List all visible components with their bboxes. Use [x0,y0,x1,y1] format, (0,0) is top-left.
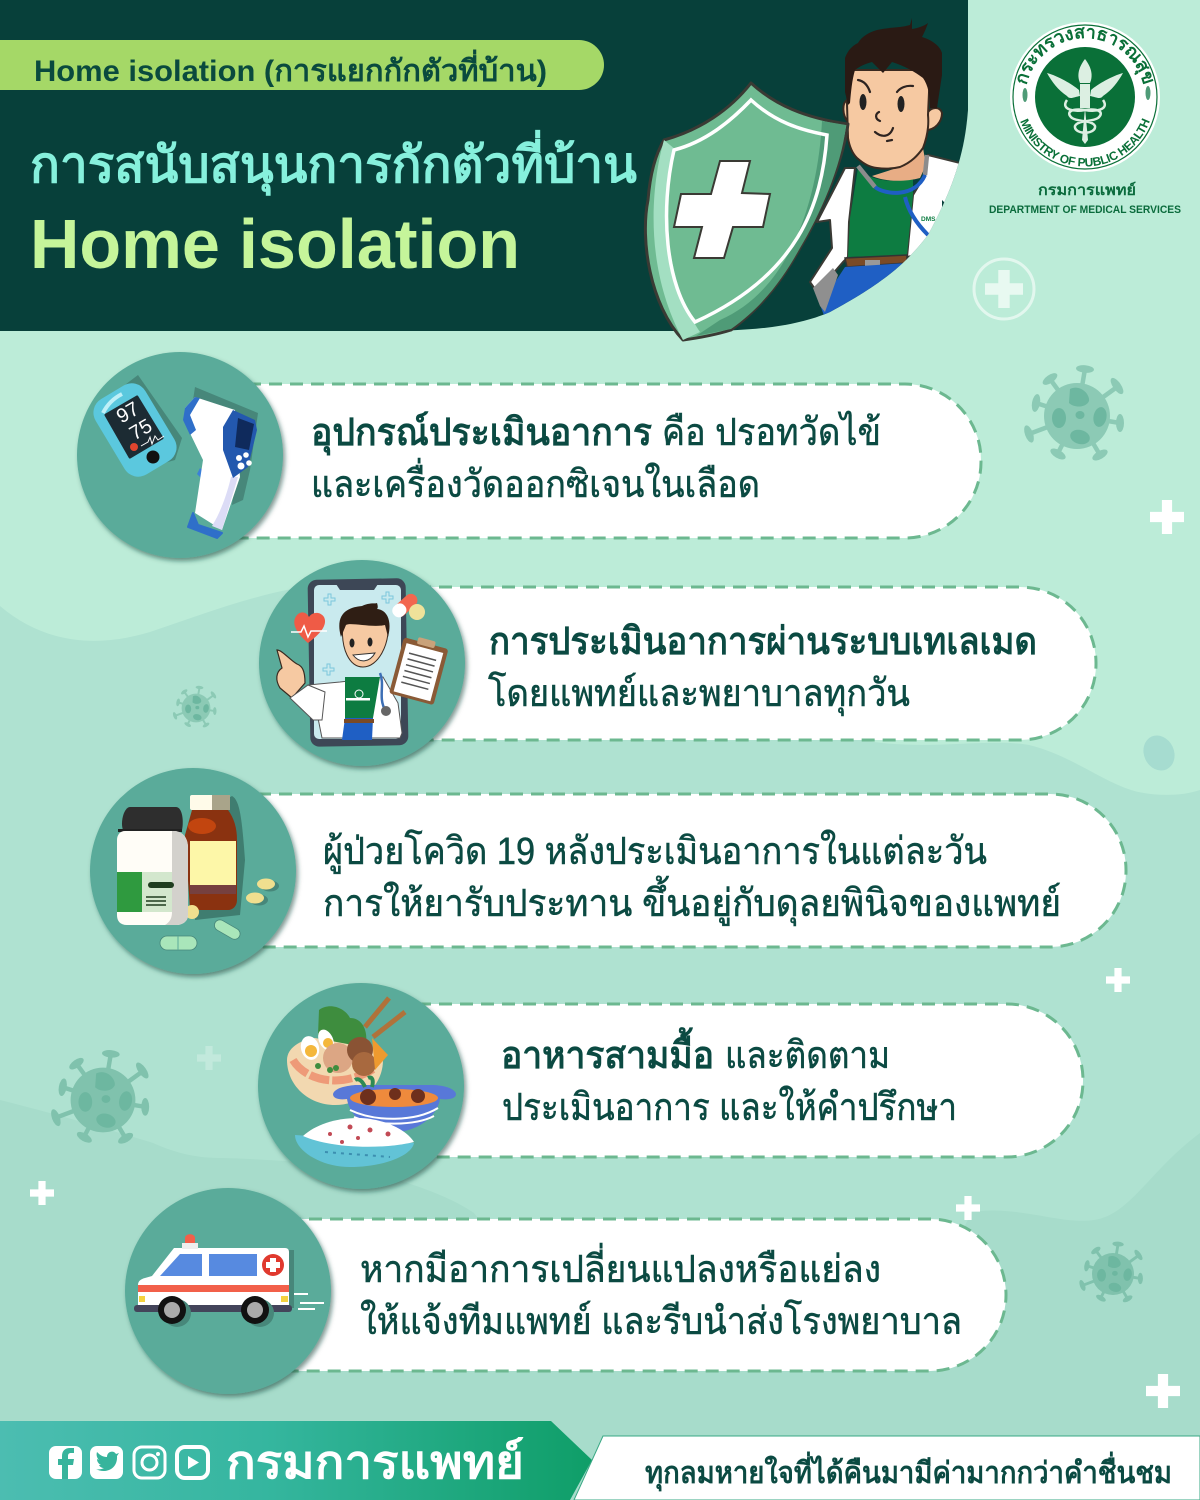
face [847,70,930,169]
shirt [848,168,913,257]
card 1 text: คือ ปรอทวัดไข้ [662,411,881,454]
card 4 text: ประเมินอาการ และให้คำปรึกษา [502,1086,957,1129]
card 2 text: การประเมินอาการผ่านระบบเทเลเมด [489,621,1037,663]
hair [845,18,942,108]
stethoscope [858,155,927,187]
card 3 text: การให้ยารับประทาน ขึ้นอยู่กับดุลยพินิจของแพทย์ [323,875,1061,926]
department name: กรมการแพทย์ [226,1436,524,1488]
icon: phone doctor [277,578,449,747]
logo caption english: DEPARTMENT OF MEDICAL SERVICES [989,204,1181,216]
logo arc english: MINISTRY OF PUBLIC HEALTH [1020,118,1150,166]
jeans [820,263,902,315]
icon: pulse oximeter [87,375,183,483]
title english: Home isolation [30,205,520,283]
stethoscope [380,673,385,710]
tag pill [0,40,604,90]
card 5 text [360,1243,962,1343]
card 5 pill [170,1219,1006,1371]
card 4 circle [258,983,464,1189]
panel: telemedicine [259,560,1096,766]
icon: ambulance [134,1234,324,1327]
card 5 text: ให้แจ้งทีมแพทย์ และรีบนำส่งโรงพยาบาล [360,1299,962,1343]
neck [872,148,926,181]
card 5 text: หากมีอาการเปลี่ยนแปลงหรือแย่ลง [360,1243,881,1291]
header panel [0,0,968,331]
icon: infrared thermometer [183,387,258,538]
panel: ambulance [125,1188,1006,1394]
pills [391,591,420,620]
logo [989,22,1181,216]
eyes [860,94,866,110]
icon: pulse oximeter: 75 [126,415,156,445]
circled plus [974,259,1034,319]
ears [843,100,942,130]
card 2 pill [300,587,1096,740]
card 1 text: และเครื่องวัดออกซิเจนในเลือด [311,458,760,506]
card 3 pill [140,794,1126,947]
icon: medicine bottles [117,795,279,950]
card 1 circle [77,352,283,558]
emblem [1047,59,1123,144]
footer band [0,1421,592,1500]
card 1 pill [130,384,981,538]
brows and mouth [858,80,913,141]
clipboard [389,633,449,705]
title thai: การสนับสนุนการกักตัวที่บ้าน [30,130,637,196]
panel: medicine [90,768,1126,974]
card 2 circle [259,560,465,766]
virus right small [1078,1241,1144,1304]
social icons [49,1446,208,1479]
logo arc thai: กระทรวงสาธารณสุข [1018,26,1154,84]
card 4 pill [300,1004,1083,1157]
tag pill: Home isolation (การแยกกักตัวที่บ้าน) [34,49,547,88]
belt [845,255,907,267]
shield icon [645,83,848,340]
coat left [810,168,855,292]
card 5 circle [125,1188,331,1394]
panel: meals [258,983,1083,1189]
coat right [907,154,959,258]
pointing hand [277,650,305,698]
doctor character: DMS [921,216,936,223]
logo caption thai: กรมการแพทย์ [1038,181,1136,199]
card 4 text [501,1027,957,1129]
coat [308,677,402,738]
icon: food [287,998,456,1167]
panel: symptom devices [77,352,981,558]
card 1 text [311,411,881,506]
card 4 text: และติดตาม [725,1035,890,1077]
card 3 text [323,829,1061,926]
card 1 text: อุปกรณ์ประเมินอาการ [311,411,653,456]
card 2 text: โดยแพทย์และพยาบาลทุกวัน [488,671,910,716]
plus marks [30,500,1184,1408]
card 2 text [488,621,1037,716]
card 3 circle [90,768,296,974]
face [342,622,388,667]
card 4 text: อาหารสามมื้อ [501,1027,714,1077]
heart [294,612,325,643]
footer slogan panel [574,1436,1200,1500]
card 3 text: ผู้ป่วยโควิด 19 หลังประเมินอาการในแต่ละวัน [323,829,987,874]
virus left small [172,685,217,728]
blob [1138,730,1180,776]
virus left large [49,1049,151,1146]
icon: pulse oximeter: 97 [113,398,143,428]
virus top right [1022,364,1126,463]
doctor character [810,18,968,318]
pills [261,880,279,892]
